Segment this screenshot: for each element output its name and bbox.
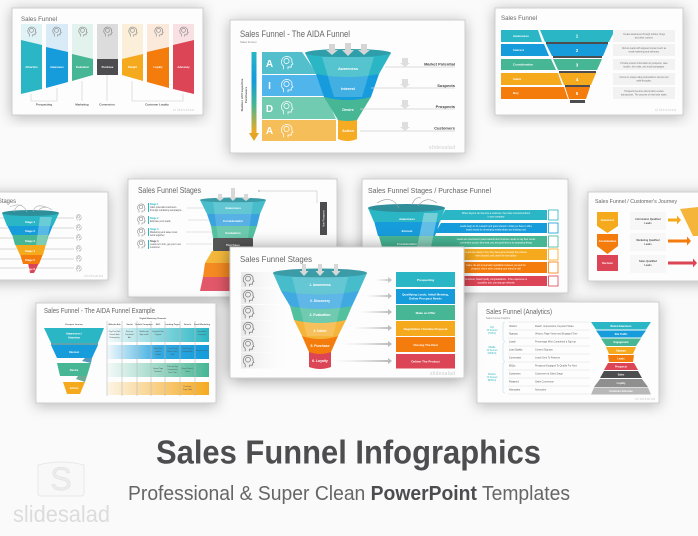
bar labels: Interest [513, 48, 524, 52]
metric names: Signups [509, 332, 518, 336]
cell text: Retargeting [110, 336, 119, 339]
cell text: Facebook [125, 334, 134, 336]
hourglass funnel [200, 198, 270, 291]
row text: brand should be developing relationships and building trust [466, 228, 526, 232]
footer: slidesalad [635, 397, 655, 401]
funnel labels: Consideration [397, 242, 417, 246]
metric descriptions: Prospects Engaged To Qualify For Next [535, 364, 577, 368]
row text: Leads are convinced to pass towards their business needs or say their needs [457, 238, 536, 241]
funnel labels: Signups [616, 350, 627, 352]
funnel labels [338, 67, 358, 133]
description text: walk-throughs. [637, 80, 652, 82]
stage labels: Awareness [50, 65, 64, 69]
column headers: Mobile Campaign [135, 324, 153, 326]
bottom labels: Conversion [99, 102, 115, 106]
group labels: (BOFU) [488, 379, 496, 382]
cell text: Ads [128, 336, 131, 339]
AIDA letters: A [266, 126, 273, 137]
heading: Sales Funnel / Customer's Journey [595, 199, 677, 205]
heading: Sales Funnel Stages [240, 254, 312, 264]
stage labels: Stage 4 [25, 249, 35, 253]
metric names: Customers [509, 372, 521, 376]
logo wordmark: slidesalad [13, 501, 110, 527]
tier labels: Desire [70, 368, 79, 372]
column lines [107, 321, 195, 396]
metric descriptions: Advocates [535, 388, 547, 392]
row text: a positive one, you may get referrals [477, 282, 515, 284]
numbers: 1 [576, 34, 579, 38]
outcome labels: Define Prospect Needs [409, 296, 442, 300]
outcome labels: Negotiation / Finalize Proposal [404, 327, 448, 331]
arrows [668, 216, 697, 268]
funnel labels: Brand Awareness [611, 325, 632, 328]
stage text [150, 203, 182, 249]
heading: Sales Funnel [501, 15, 538, 22]
description text: Provide product information to prospects; case [620, 62, 668, 65]
lead text: Marketing Qualified [636, 239, 660, 242]
cell text: Newsletter [198, 330, 207, 333]
curved arrows [10, 205, 52, 212]
stage text: customer [150, 246, 160, 249]
side label [320, 202, 327, 235]
stage labels: Stage 2 [25, 229, 35, 233]
description text: email marketing and webinars. [628, 50, 660, 54]
cell text: Pay-Per-Click [109, 330, 120, 333]
heading: Sales Funnel - The AIDA Funnel [240, 29, 350, 39]
lead text: Information Qualified [635, 218, 661, 221]
funnel labels: 1. Awareness [309, 283, 331, 287]
stage labels: Decision [602, 261, 613, 265]
right labels: Market Potential [424, 62, 455, 66]
lead text: Leads [644, 243, 652, 246]
right labels: Prospects [436, 104, 456, 109]
tier labels [66, 332, 82, 390]
panel: numbered funnel [495, 8, 683, 115]
stage text: through marketing campaigns [150, 209, 182, 212]
row text [457, 212, 536, 284]
bottom labels: Marketing [75, 102, 89, 106]
bar labels: Buy [513, 91, 519, 95]
description text: Create awareness through articles, blogs [623, 33, 666, 36]
metric names: Visitors [509, 325, 518, 328]
AIDA letters: A [266, 59, 273, 70]
cell text: Content [155, 350, 162, 353]
footer: slidesalad [173, 108, 194, 112]
row text: When anyone can become a customer, they have connected about [462, 212, 530, 215]
logo mark [38, 461, 84, 497]
subheading: Sales Funnel Analytics [486, 317, 511, 320]
funnel labels: Loyalty [617, 382, 626, 385]
head icons [281, 56, 293, 137]
side label: Non Prospects [322, 210, 326, 227]
footer: slidesalad [84, 274, 103, 278]
cell text: Banner Ads [110, 333, 119, 336]
tier labels: Interest [69, 350, 79, 354]
metric descriptions: Percentage Who Completed a Sign-up [535, 340, 577, 344]
panel: six stage funnel cropped left [0, 192, 108, 280]
stage labels: Stage 1 [25, 220, 35, 224]
funnel chart [305, 49, 391, 141]
outcome labels: Qualifying Leads, Initial Meeting, [402, 292, 449, 296]
row text: Leads are ready to buy; they have gone through the process [465, 251, 528, 254]
dark edges [546, 42, 608, 103]
metric names: MQLs [509, 364, 516, 368]
left row strips [241, 272, 293, 368]
description text: Prospects become clients after a sales [624, 90, 665, 93]
funnel labels: Interest [341, 87, 356, 91]
funnel labels: Site Traffic [615, 333, 628, 336]
stage text: Marketing and sales must [150, 231, 178, 234]
cell text: White Paper [167, 350, 178, 353]
numbers [576, 34, 579, 96]
description text [620, 33, 669, 96]
stage labels: Evaluation [76, 65, 89, 69]
funnel labels: 6. Loyalty [312, 359, 328, 363]
stage text: Stage 3 [150, 228, 159, 231]
cell text: Campaign [198, 334, 206, 336]
lead text [635, 218, 661, 267]
stage text: Gain potential customers [150, 206, 177, 209]
panel: sales funnel stages featured [230, 247, 464, 378]
metric names: Leads [509, 340, 516, 344]
down arrows into funnel [300, 264, 340, 276]
brackets [31, 75, 183, 101]
metric names: Lead Quality [509, 348, 523, 352]
row text: Leads begin to do research and grow interest in what you have to offer, [460, 225, 532, 228]
right labels [424, 62, 456, 130]
AIDA letters: D [266, 104, 273, 115]
funnel labels [223, 206, 243, 247]
right arrows [400, 58, 410, 131]
description text: and other content. [635, 36, 654, 40]
metric descriptions: Visitors, Page Views and Engaged Time [535, 332, 578, 336]
funnel tiers [44, 328, 104, 394]
row text: prospect, this is when creating your brand is vital [471, 268, 521, 270]
heading: Sales Funnel - The AIDA Funnel Example [44, 308, 155, 315]
lead text: Leads [644, 264, 652, 267]
numbers: 2 [576, 48, 579, 53]
funnel labels: Evaluation [225, 231, 241, 235]
group labels: (TOFU) [488, 332, 496, 335]
metric descriptions: Reach, Impressions, Keyword Share [535, 325, 574, 328]
group labels: Top [490, 326, 495, 329]
funnel labels [609, 325, 633, 393]
icons: heads [28, 27, 188, 36]
column headers: SEO [156, 324, 161, 326]
group labels: Of Funnel [487, 329, 498, 332]
stage text: work together [150, 234, 165, 237]
bar labels [513, 34, 533, 95]
axis label: Purchasers [244, 86, 248, 103]
funnel labels [309, 283, 331, 363]
metric descriptions: Leads Sent To Partners [535, 356, 561, 360]
bottom labels [36, 102, 169, 106]
metric descriptions: Content Signups [535, 348, 553, 352]
tier labels: Attention [68, 336, 80, 340]
group labels: Of Funnel [487, 376, 498, 379]
cell text: Videos [155, 354, 161, 356]
funnel labels [397, 217, 417, 246]
row text: conversion occurs; they lead, you are good idea to try proposing things [460, 242, 533, 244]
cell text: Case Study [168, 347, 177, 350]
cell text: Offer [170, 353, 175, 356]
metric names: Advocates [509, 388, 521, 392]
brackets [503, 322, 505, 393]
icon tiles [548, 210, 558, 286]
cell text: Terms [185, 370, 190, 373]
right connector [258, 190, 317, 203]
footer: slidesalad [429, 145, 455, 151]
heading: Sales Funnel (Analytics) [486, 307, 552, 316]
stage labels: Attraction [25, 65, 38, 69]
funnel labels: Consideration [223, 219, 243, 223]
cell text: Paid Search [182, 347, 193, 350]
funnel chart [273, 268, 367, 369]
stage labels: Stage 5 [25, 258, 35, 262]
funnel stage shapes [21, 40, 194, 94]
panel: AIDA funnel example [36, 303, 216, 403]
stage labels: Loyalty [153, 65, 163, 69]
bar labels: Consideration [513, 62, 533, 66]
funnel labels: Customer Advocate [609, 390, 633, 393]
stage accent bars [148, 203, 149, 249]
row separators [508, 322, 590, 394]
panel: customer journey [588, 192, 698, 281]
funnel edge [680, 207, 698, 236]
stage text: Stage 2 [150, 217, 159, 220]
panel: funnel analytics [477, 302, 659, 403]
funnel labels: Action [342, 129, 355, 133]
outcome labels: Prospecting [417, 278, 434, 282]
bottom labels: Prospecting [36, 102, 52, 106]
logo mark: S [50, 461, 72, 497]
stage labels: Awareness [601, 218, 615, 222]
column headers: Prospect Journey [65, 323, 84, 326]
description text: Nurture leads with targeted content such as [622, 47, 667, 50]
stage text: Stage 4 [150, 240, 159, 243]
column headers [65, 317, 211, 326]
row text: Sales, the act to seal and negotiation between you and the [466, 264, 527, 267]
heading: Sales Funnel Stages / Purchase Funnel [368, 186, 491, 195]
cell text: Page Offer [183, 388, 192, 391]
row text: their decision; and chose the best option [475, 254, 517, 258]
subheading: Sales Funnel [240, 40, 257, 44]
right labels: Suspects [437, 83, 456, 88]
funnel labels: Desire [342, 108, 354, 112]
group labels: (MOFU) [488, 352, 497, 355]
funnel chart [368, 204, 445, 247]
stage blocks [597, 212, 618, 271]
subtitle: Professional & Super Clean PowerPoint Templates [128, 483, 570, 505]
column headers: Email Marketing [194, 323, 211, 326]
row text: Customer, brand loyalty, congratulations - if the experience is [465, 278, 528, 281]
numbers: 3 [576, 62, 579, 68]
numbers: 5 [576, 91, 579, 96]
cell text: Demo Page [153, 368, 163, 370]
stage labels [25, 65, 190, 69]
stage labels: Purchase [102, 65, 114, 69]
outcome labels: Closing The Deal [413, 343, 438, 347]
tier labels: Awareness / [66, 332, 82, 336]
cell text: Free Trial [169, 371, 177, 374]
curved arrows [377, 198, 437, 208]
funnel labels: Sales [618, 374, 625, 376]
funnel labels: 4. Intent [314, 329, 327, 333]
funnel labels: Interest [402, 229, 412, 233]
funnel labels: Engagement [613, 341, 629, 344]
down arrows into funnel [326, 43, 370, 56]
outcome labels: Deliver The Product [411, 360, 440, 364]
column headers: Landing Pages [165, 324, 181, 326]
cell text [109, 330, 208, 391]
AIDA letters: I [268, 81, 271, 92]
cell text: Blog Post [154, 347, 163, 350]
description text: studies, free trials, and email campaigns. [623, 66, 665, 68]
cell text: Purchase [184, 385, 192, 388]
left head icons [243, 274, 254, 367]
vertical gradient arrow [249, 52, 259, 141]
stage labels [25, 220, 35, 271]
connector lines [186, 208, 212, 244]
cell text: Pricing Page [167, 365, 178, 368]
funnel bars [540, 30, 615, 99]
group labels: Of Funnel [487, 349, 498, 352]
dark folds [51, 343, 98, 382]
bar labels: Intent [513, 77, 521, 81]
AIDA rows [262, 52, 336, 141]
metric names [509, 325, 523, 392]
funnel labels: Awareness [338, 67, 358, 71]
footer: slidesalad [655, 108, 676, 112]
cell text: Brand Search [182, 367, 193, 370]
stage text: Leads turn into, get your new [150, 243, 181, 246]
bar labels: Awareness [513, 34, 529, 38]
group labels: Middle [488, 346, 496, 349]
stage labels: Advocacy [177, 65, 190, 69]
funnel labels: 3. Evaluation [310, 313, 330, 317]
panel: sales funnel stages with hourglass [128, 179, 337, 297]
row bars [430, 210, 547, 286]
bottom labels: Customer Loyalty [145, 102, 169, 106]
stage labels [599, 218, 617, 265]
outcome labels: Make an Offer [416, 311, 436, 315]
AIDA letters [266, 59, 273, 137]
panel: purchase funnel [362, 179, 568, 293]
cell text: Posts on [126, 330, 133, 333]
description text: Focus on unique value propositions; demos and [620, 76, 669, 79]
cell text: Keyword Use [152, 330, 164, 333]
funnel labels: Prospects [615, 366, 628, 368]
funnel labels: Purchase [226, 243, 240, 247]
panel: AIDA funnel [230, 20, 465, 153]
tier labels: Action [70, 386, 79, 390]
group labels [487, 326, 498, 382]
lead text: Sales Qualified [639, 260, 657, 263]
description boxes [613, 30, 675, 99]
metric names: Conversion [509, 356, 522, 360]
heading: Sales Funnel Stages [138, 186, 201, 195]
stage labels: Stage 3 [25, 239, 35, 243]
column backgrounds [21, 24, 194, 60]
column headers: Website Ads [108, 323, 122, 326]
stage labels: Stage 6 [25, 267, 35, 271]
right labels: Customers [434, 126, 456, 130]
guide lines [0, 218, 74, 268]
column headers: Search [184, 323, 192, 326]
numbers: 4 [576, 77, 579, 82]
funnel labels: Awareness [225, 206, 241, 210]
column headers: Digital Marketing Channels [140, 317, 167, 320]
column headers: Social [126, 324, 133, 326]
cell text: Google Ads [183, 350, 192, 353]
cell text: Reviews [154, 371, 162, 373]
right icons [76, 215, 81, 272]
stage labels: Delight [128, 65, 137, 69]
heading: Sales Funnel [21, 16, 58, 23]
funnel labels: Leads [617, 358, 625, 360]
metric descriptions: Customers at Sales Stage [535, 372, 563, 376]
metric names: Retained [509, 380, 519, 384]
cell text: Nurture Series [196, 349, 208, 352]
funnel labels: 2. Discovery [310, 299, 330, 303]
lead boxes [630, 212, 666, 273]
funnel labels: 5. Purchase [310, 344, 330, 348]
cell text: Comparison [167, 368, 178, 371]
outcome boxes [396, 272, 455, 368]
analytics funnel [591, 322, 651, 394]
right guide lines [360, 67, 455, 131]
stage text: Stage 1 [150, 203, 159, 206]
gradient arrows to boxes [333, 277, 392, 364]
left bars [501, 30, 568, 99]
axis label: Number of Prospective [240, 79, 244, 111]
metric descriptions: Sales Conversion [535, 380, 554, 384]
main title: Sales Funnel Infographics [156, 434, 541, 470]
panel: sales funnel seven stages [12, 8, 203, 115]
lead text: Leads [644, 222, 652, 225]
group labels: Bottom [488, 373, 496, 376]
cell text: Organic [155, 333, 161, 336]
arrows into funnel [216, 188, 250, 201]
cell text: App install [140, 333, 149, 336]
row text: in your company [488, 216, 505, 218]
cell text: Mobile ads [139, 331, 149, 333]
gradient rows [107, 328, 209, 395]
funnel chart [2, 210, 59, 273]
metric descriptions [535, 325, 578, 392]
description text: transactions. The process of retail sale starts. [621, 94, 667, 96]
footer: slidesalad [430, 371, 455, 377]
outcome labels [402, 278, 449, 364]
stage labels: Consideration [599, 239, 617, 243]
funnel labels: Awareness [399, 217, 415, 221]
left icons [138, 204, 145, 248]
stage text: Educate your leads [150, 220, 171, 223]
